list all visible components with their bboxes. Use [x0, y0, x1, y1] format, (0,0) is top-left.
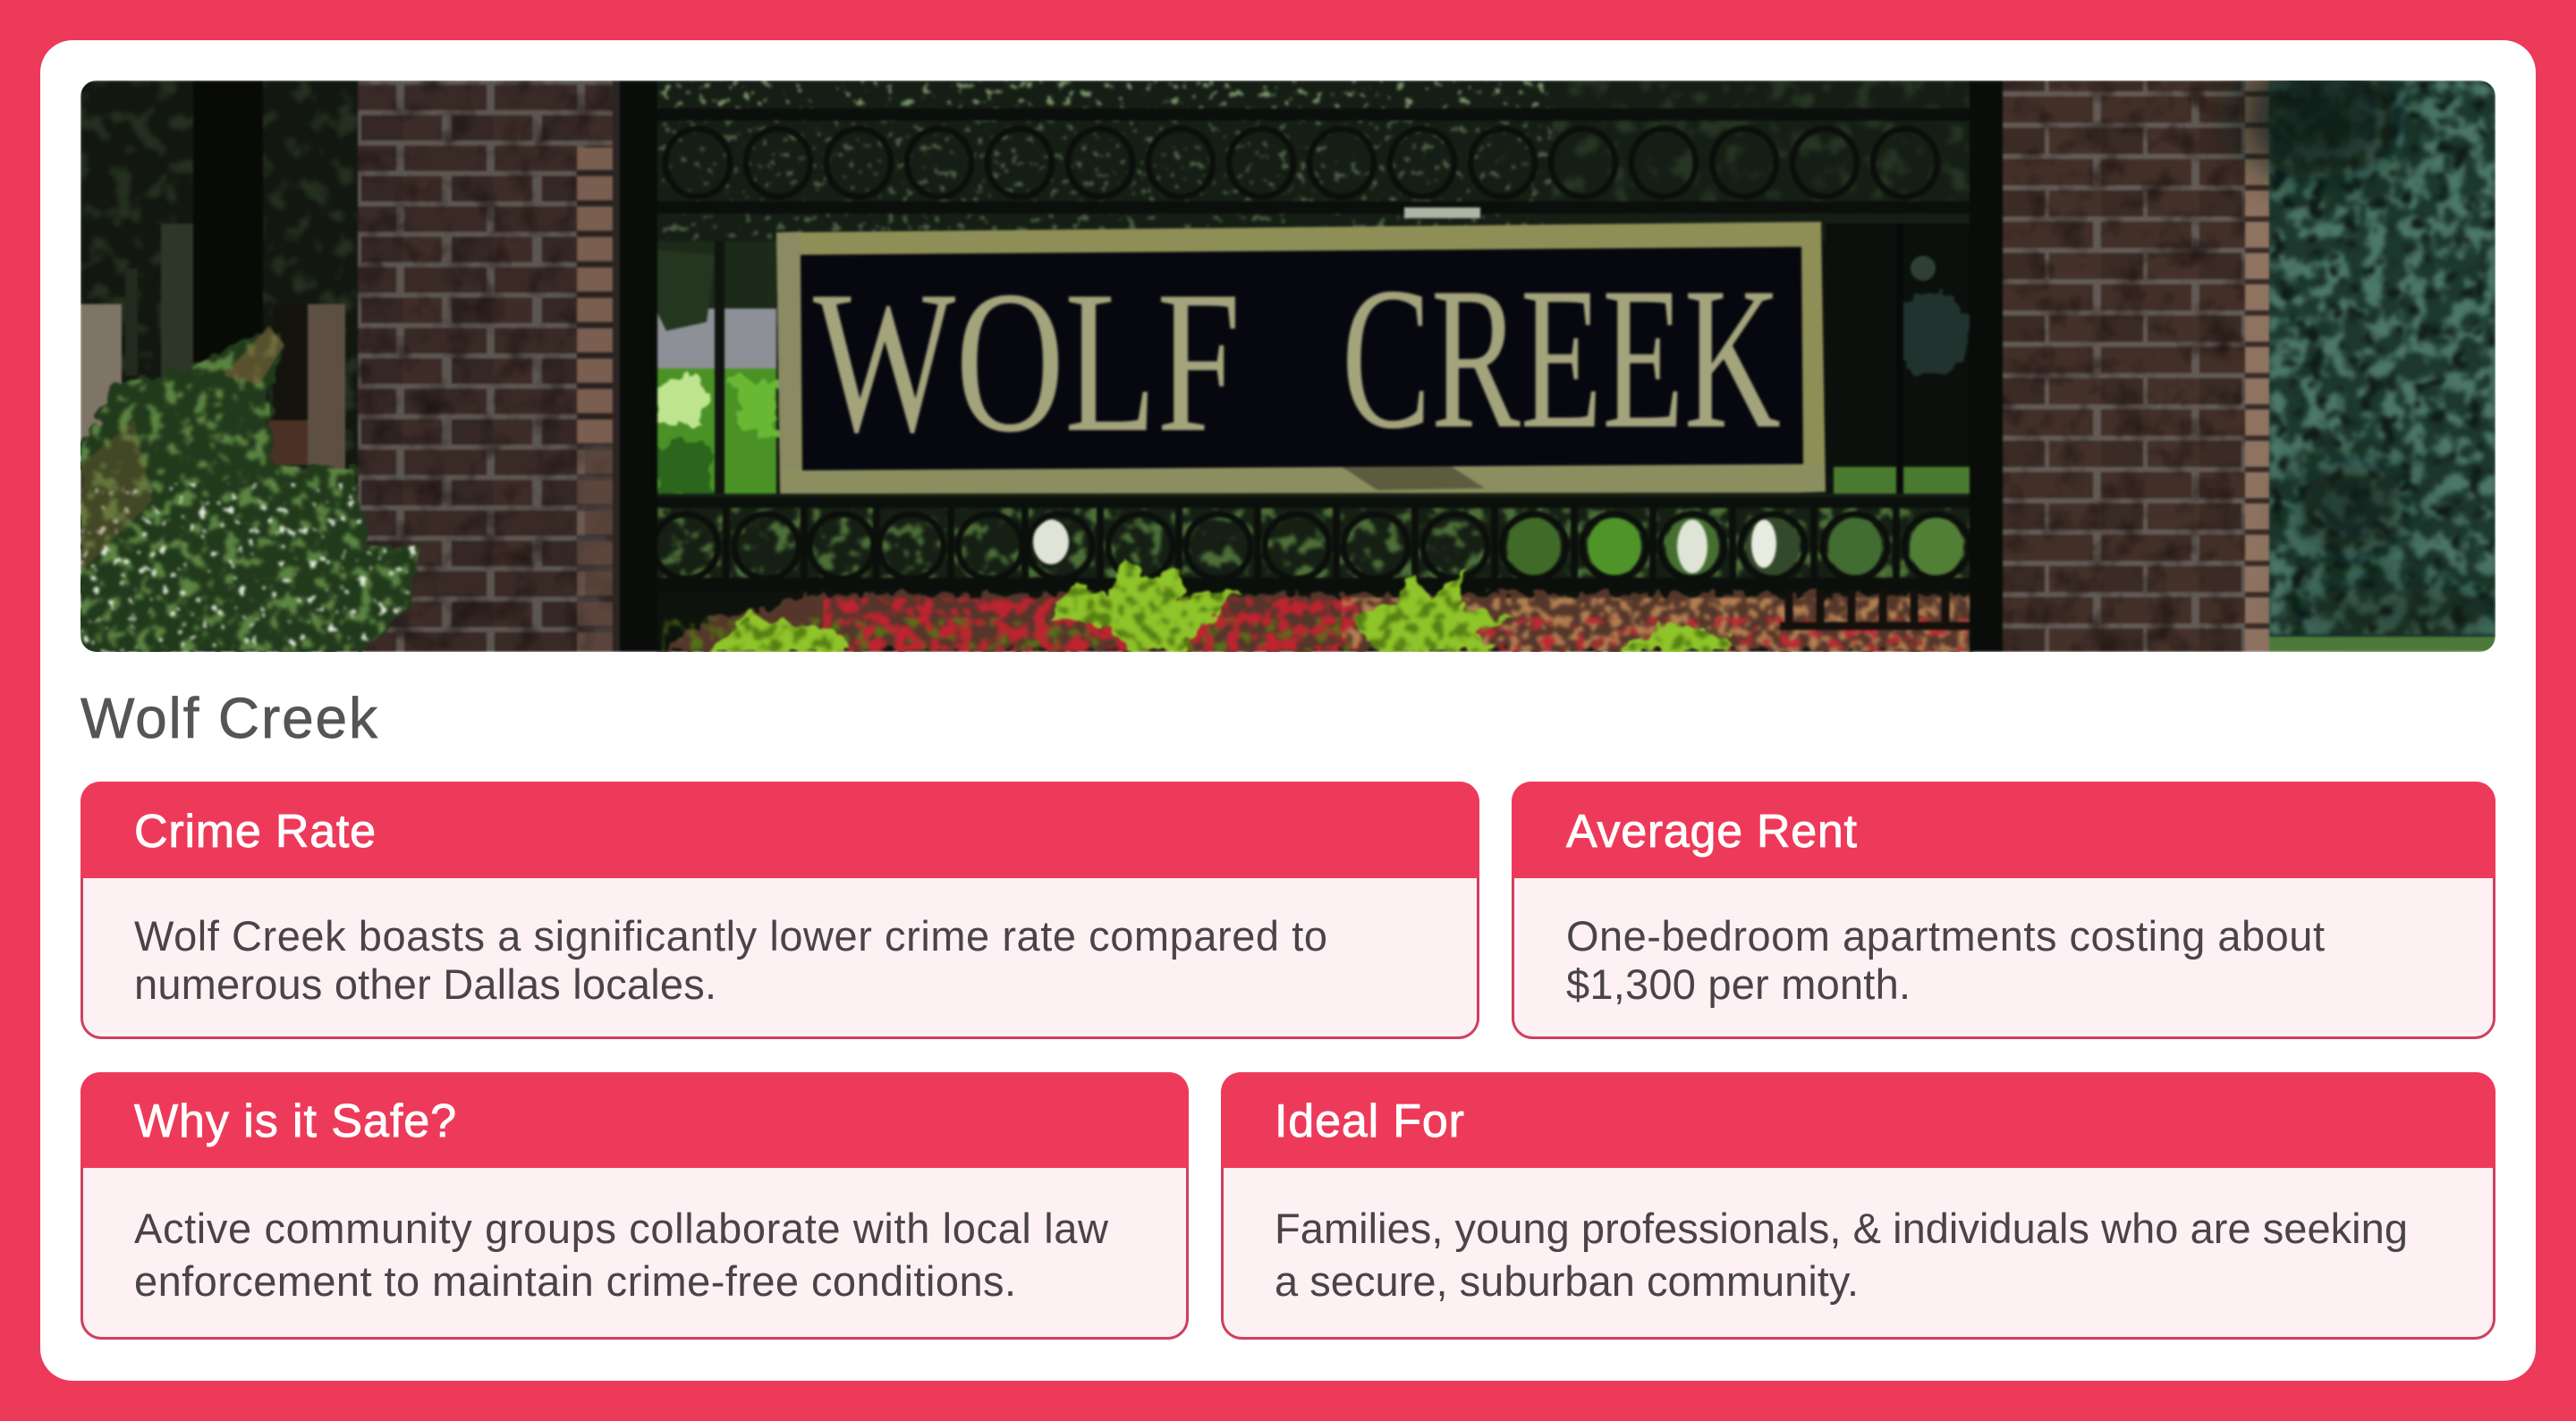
lower gate band with ring ornaments [654, 494, 1972, 592]
body text: enforcement to maintain crime-free conditions. [134, 1257, 1016, 1305]
left background foliage [80, 80, 358, 470]
photo: Wolf Creek entrance sign [80, 54, 2504, 653]
body text [1275, 1205, 2408, 1305]
green leaf clumps [707, 559, 1735, 652]
card: ideal for [1221, 1072, 2496, 1338]
body text: Active community groups collaborate with local law [134, 1205, 1109, 1252]
body text: a secure, suburban community. [1275, 1257, 1859, 1305]
sign board [776, 222, 1826, 494]
heading: Average Rent [1566, 806, 1858, 858]
heading: Crime Rate [134, 806, 376, 858]
card: crime rate [80, 782, 1479, 1037]
heading: Ideal For [1275, 1095, 1464, 1147]
gate posts [620, 80, 2004, 652]
body text: Families, young professionals, & individuals who are seeking [1275, 1205, 2408, 1252]
body text: $1,300 per month. [1566, 960, 1911, 1008]
body text [134, 912, 1327, 1008]
title: Wolf Creek [80, 686, 378, 750]
sign inner panel [801, 247, 1803, 470]
left brick pillar [358, 80, 620, 652]
sign shadow [1342, 465, 1485, 490]
sign frame [776, 222, 1826, 494]
ring strokes [654, 503, 1972, 590]
leaf shading [698, 554, 1744, 653]
iron gate background and foliage [657, 80, 1970, 241]
ring interiors [1033, 518, 1963, 575]
body text: One-bedroom apartments costing about [1566, 912, 2325, 960]
card: why is it safe [80, 1072, 1189, 1338]
left flowering bush [80, 313, 429, 653]
flower bed [657, 554, 1972, 653]
left window: sky and bright foliage [657, 241, 776, 496]
highlight above sign [1404, 207, 1480, 218]
picket bars [1780, 590, 1972, 626]
body text: Wolf Creek boasts a significantly lower crime rate compared to [134, 912, 1327, 960]
body text [134, 1205, 1109, 1305]
heading: Why is it Safe? [134, 1095, 456, 1147]
right of sign: dark foliage and grass [1826, 224, 1973, 501]
card: average rent [1512, 782, 2496, 1037]
sign lettering: CREEK [1342, 246, 1781, 471]
right brick pillar [2003, 80, 2269, 652]
right evergreen tree [2236, 54, 2504, 652]
body text [1566, 912, 2325, 1008]
sign lettering [811, 290, 1782, 435]
gate top ornament rail [657, 114, 1972, 207]
body text: numerous other Dallas locales. [134, 960, 716, 1008]
sign lettering: WOLF [813, 250, 1241, 475]
